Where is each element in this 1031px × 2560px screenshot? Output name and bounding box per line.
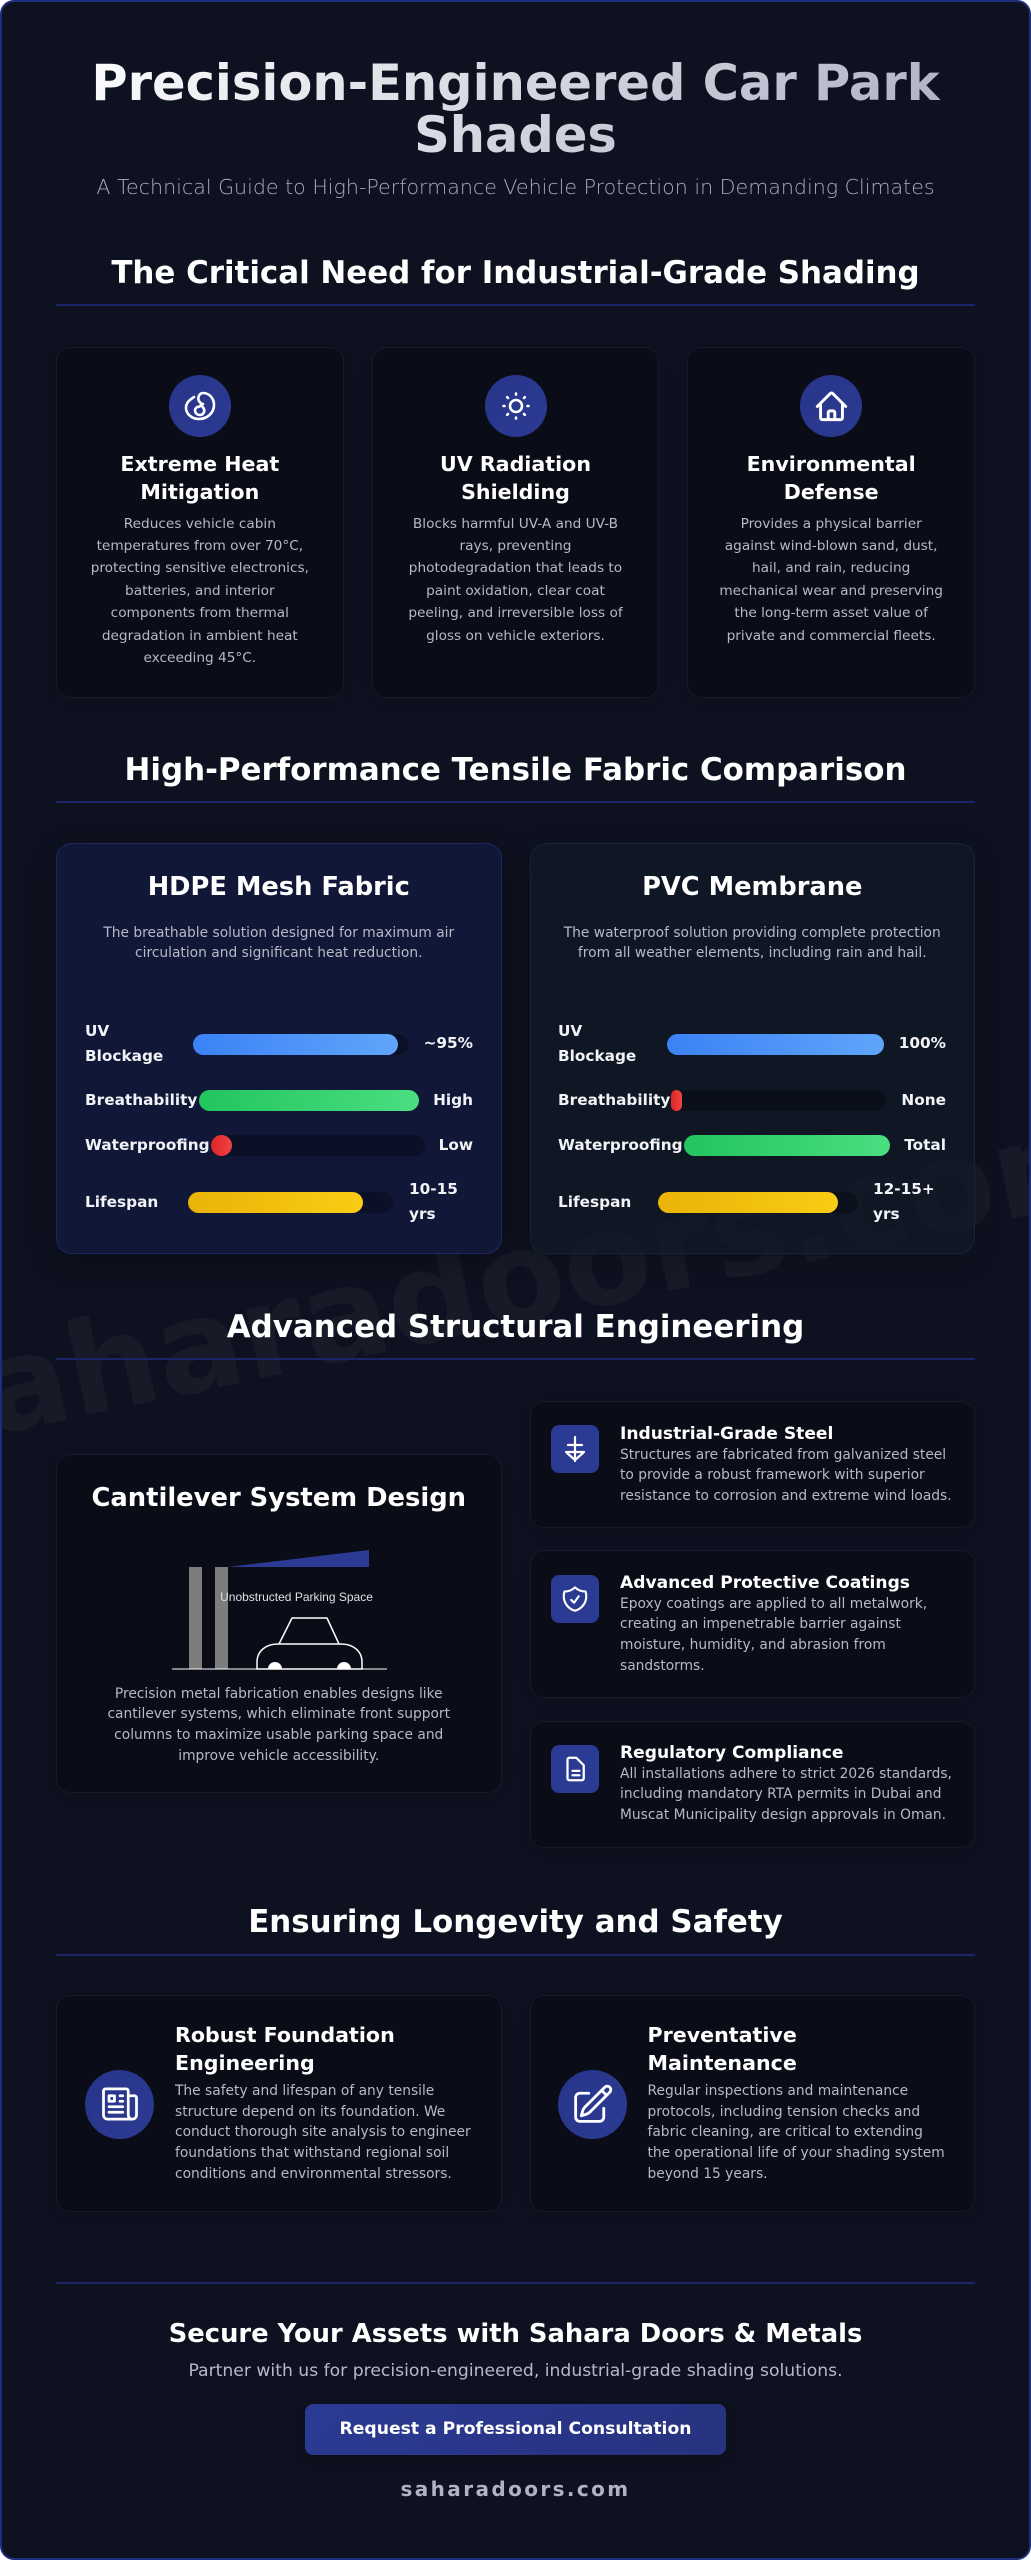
metric: waterproofing <box>558 1135 946 1156</box>
card text: private and commercial fleets. <box>727 628 936 644</box>
item heading <box>648 2023 797 2074</box>
fabric description: from all weather elements, including rain and hail. <box>578 945 927 961</box>
panel: robust foundation engineering <box>56 1995 502 2212</box>
card text: Provides a physical barrier <box>741 516 922 532</box>
metric: breathability: None <box>901 1091 946 1109</box>
panel: cantilever system design <box>56 1454 502 1793</box>
metric: waterproofing: Low <box>439 1136 473 1154</box>
fabric description: circulation and significant heat reduction. <box>135 945 422 961</box>
panel: industrial-grade steel <box>530 1401 975 1528</box>
item heading: Engineering <box>175 2050 315 2074</box>
panel: advanced protective coatings <box>530 1550 975 1698</box>
item text <box>620 1447 952 1504</box>
title: Precision-Engineered Car Park <box>91 54 940 112</box>
title <box>56 57 975 161</box>
fabric description <box>564 924 941 961</box>
panel: preventative maintenance <box>530 1995 975 2212</box>
panel: regulatory compliance <box>530 1721 975 1848</box>
card heading <box>440 452 591 504</box>
metric: UV blockage: UV <box>558 1022 582 1040</box>
item text: All installations adhere to strict 2026 standards, <box>620 1766 952 1782</box>
item text: Structures are fabricated from galvanized steel <box>620 1447 946 1463</box>
panel text: cantilever systems, which eliminate front support <box>107 1706 450 1722</box>
card text: against wind-blown sand, dust, <box>725 538 938 554</box>
card text: Reduces vehicle cabin <box>124 516 276 532</box>
card heading <box>747 452 916 504</box>
diagram: cantilever shade over car <box>172 1550 387 1670</box>
item heading: Maintenance <box>648 2050 797 2074</box>
fabric description: The waterproof solution providing complete protection <box>564 924 941 940</box>
card text: peeling, and irreversible loss of <box>408 605 623 621</box>
panel: HDPE mesh fabric <box>56 843 502 1254</box>
card text <box>408 516 623 644</box>
card heading: UV Radiation <box>440 452 591 476</box>
metric: waterproofing: Total <box>904 1136 946 1154</box>
card text: Blocks harmful UV-A and UV-B <box>413 516 618 532</box>
diagram: cantilever shade over car: Unobstructed Parking Space <box>220 1590 373 1604</box>
metric: lifespan <box>558 1180 935 1222</box>
card text: hail, and rain, reducing <box>752 560 910 576</box>
card text <box>91 516 309 666</box>
card text: mechanical wear and preserving <box>719 583 943 599</box>
fabric description <box>103 924 454 961</box>
metric: waterproofing: Waterproofing <box>558 1136 683 1154</box>
item text <box>620 1766 952 1823</box>
fabric title: PVC Membrane <box>642 872 862 902</box>
item heading: Preventative <box>648 2023 797 2047</box>
metric: waterproofing <box>85 1135 473 1156</box>
item text: to provide a robust framework with superior <box>620 1467 925 1483</box>
icon: document <box>551 1745 599 1793</box>
card text: degradation in ambient heat <box>102 628 298 644</box>
item text: Muscat Municipality design approvals in Oman. <box>620 1807 946 1823</box>
card text: gloss on vehicle exteriors. <box>426 628 605 644</box>
panel text: columns to maximize usable parking space and <box>114 1727 443 1743</box>
metric: UV blockage <box>85 1022 473 1064</box>
item text: beyond 15 years. <box>648 2166 768 2182</box>
metric: lifespan: Lifespan <box>85 1193 158 1211</box>
metric: breathability <box>558 1090 946 1111</box>
icon: flame <box>169 375 231 437</box>
title: Shades <box>414 106 617 164</box>
panel: uv radiation <box>372 347 659 698</box>
metric: lifespan: 10-15 <box>409 1180 458 1198</box>
footer heading: Secure Your Assets with Sahara Doors & Metals <box>169 2318 862 2348</box>
item text <box>648 2083 945 2182</box>
button: Request a Professional Consultation <box>340 2419 691 2439</box>
item text: including mandatory RTA permits in Dubai and <box>620 1786 942 1802</box>
metric: UV blockage: 100% <box>899 1034 946 1052</box>
metric: lifespan: yrs <box>409 1204 436 1222</box>
panel: PVC membrane <box>530 843 975 1254</box>
item heading: Robust Foundation <box>175 2023 395 2047</box>
card text: protecting sensitive electronics, <box>91 560 309 576</box>
card heading <box>120 452 279 504</box>
item heading: Regulatory Compliance <box>620 1743 843 1763</box>
item text <box>174 2083 471 2182</box>
item heading: Industrial-Grade Steel <box>620 1424 833 1444</box>
item text: creating an impenetrable barrier against <box>620 1616 901 1632</box>
heading: longevity and safety: Ensuring Longevity and Safety <box>248 1904 783 1940</box>
fabric description: The breathable solution designed for maximum air <box>103 924 454 940</box>
panel heading: Cantilever System Design <box>91 1483 466 1513</box>
metric: UV blockage: UV <box>85 1022 109 1040</box>
icon: pencil square <box>558 2070 627 2138</box>
item text: conduct thorough site analysis to engineer <box>175 2124 471 2140</box>
button <box>305 2404 726 2455</box>
card text: the long-term asset value of <box>734 605 928 621</box>
panel text: improve vehicle accessibility. <box>178 1748 379 1764</box>
heading: fabric comparison: High-Performance Tensile Fabric Comparison <box>125 752 906 788</box>
card text: exceeding 45°C. <box>144 650 256 666</box>
item heading: Advanced Protective Coatings <box>620 1573 910 1593</box>
icon: newspaper <box>85 2070 154 2138</box>
item text: resistance to corrosion and extreme wind loads. <box>620 1488 952 1504</box>
item heading <box>175 2023 395 2074</box>
card text: photodegradation that leads to <box>409 560 622 576</box>
metric: breathability <box>85 1090 473 1111</box>
metric: breathability: Breathability <box>85 1091 197 1109</box>
metric: lifespan <box>85 1180 458 1222</box>
metric: UV blockage: Blockage <box>558 1046 636 1064</box>
icon: sun <box>485 375 547 437</box>
card heading: Mitigation <box>140 480 259 504</box>
item text: foundations that withstand regional soil <box>175 2145 449 2161</box>
item text: structure depend on its foundation. We <box>175 2104 445 2120</box>
card text: rays, preventing <box>459 538 571 554</box>
card text: temperatures from over 70°C, <box>97 538 303 554</box>
metric: breathability: Breathability <box>558 1091 670 1109</box>
item text <box>620 1596 927 1674</box>
item text: Epoxy coatings are applied to all metalwork, <box>620 1596 927 1612</box>
heading: structural engineering: Advanced Structural Engineering <box>227 1309 804 1345</box>
card text: batteries, and interior <box>125 583 275 599</box>
panel: extreme heat <box>56 347 344 698</box>
card text: paint oxidation, clear coat <box>426 583 605 599</box>
card heading: Environmental <box>747 452 916 476</box>
item text: sandstorms. <box>620 1658 705 1674</box>
website: saharadoors.com <box>400 2477 631 2501</box>
fabric title: HDPE Mesh Fabric <box>148 872 410 902</box>
metric: UV blockage: ~95% <box>424 1034 473 1052</box>
icon: home <box>800 375 862 437</box>
metric: waterproofing: Waterproofing <box>85 1136 210 1154</box>
item text: fabric cleaning, are critical to extending <box>648 2124 923 2140</box>
item text: protocols, including tension checks and <box>648 2104 920 2120</box>
metric: lifespan: yrs <box>873 1204 900 1222</box>
panel text <box>107 1686 450 1764</box>
item text: Regular inspections and maintenance <box>648 2083 908 2099</box>
item text: The safety and lifespan of any tensile <box>175 2083 434 2099</box>
metric: lifespan: 12-15+ <box>873 1180 935 1198</box>
panel text: Precision metal fabrication enables designs like <box>115 1686 443 1702</box>
subtitle: A Technical Guide to High-Performance Vehicle Protection in Demanding Climates <box>96 175 935 199</box>
metric: UV blockage <box>558 1022 946 1064</box>
card text: components from thermal <box>111 605 289 621</box>
card text <box>719 516 943 644</box>
panel: environmental defense <box>687 347 975 698</box>
item text: the operational life of your shading system <box>648 2145 945 2161</box>
icon: anchor <box>551 1425 599 1473</box>
metric: UV blockage: Blockage <box>85 1046 163 1064</box>
card heading: Extreme Heat <box>120 452 279 476</box>
metric: lifespan: Lifespan <box>558 1193 631 1211</box>
card heading: Shielding <box>461 480 570 504</box>
heading: critical need: The Critical Need for Industrial-Grade Shading <box>111 255 920 291</box>
card heading: Defense <box>784 480 879 504</box>
footer text: Partner with us for precision-engineered, industrial-grade shading solutions. <box>188 2361 843 2381</box>
icon: shield check <box>551 1575 599 1623</box>
metric: breathability: High <box>433 1091 473 1109</box>
item text: moisture, humidity, and abrasion from <box>620 1637 886 1653</box>
item text: conditions and environmental stressors. <box>175 2166 452 2182</box>
